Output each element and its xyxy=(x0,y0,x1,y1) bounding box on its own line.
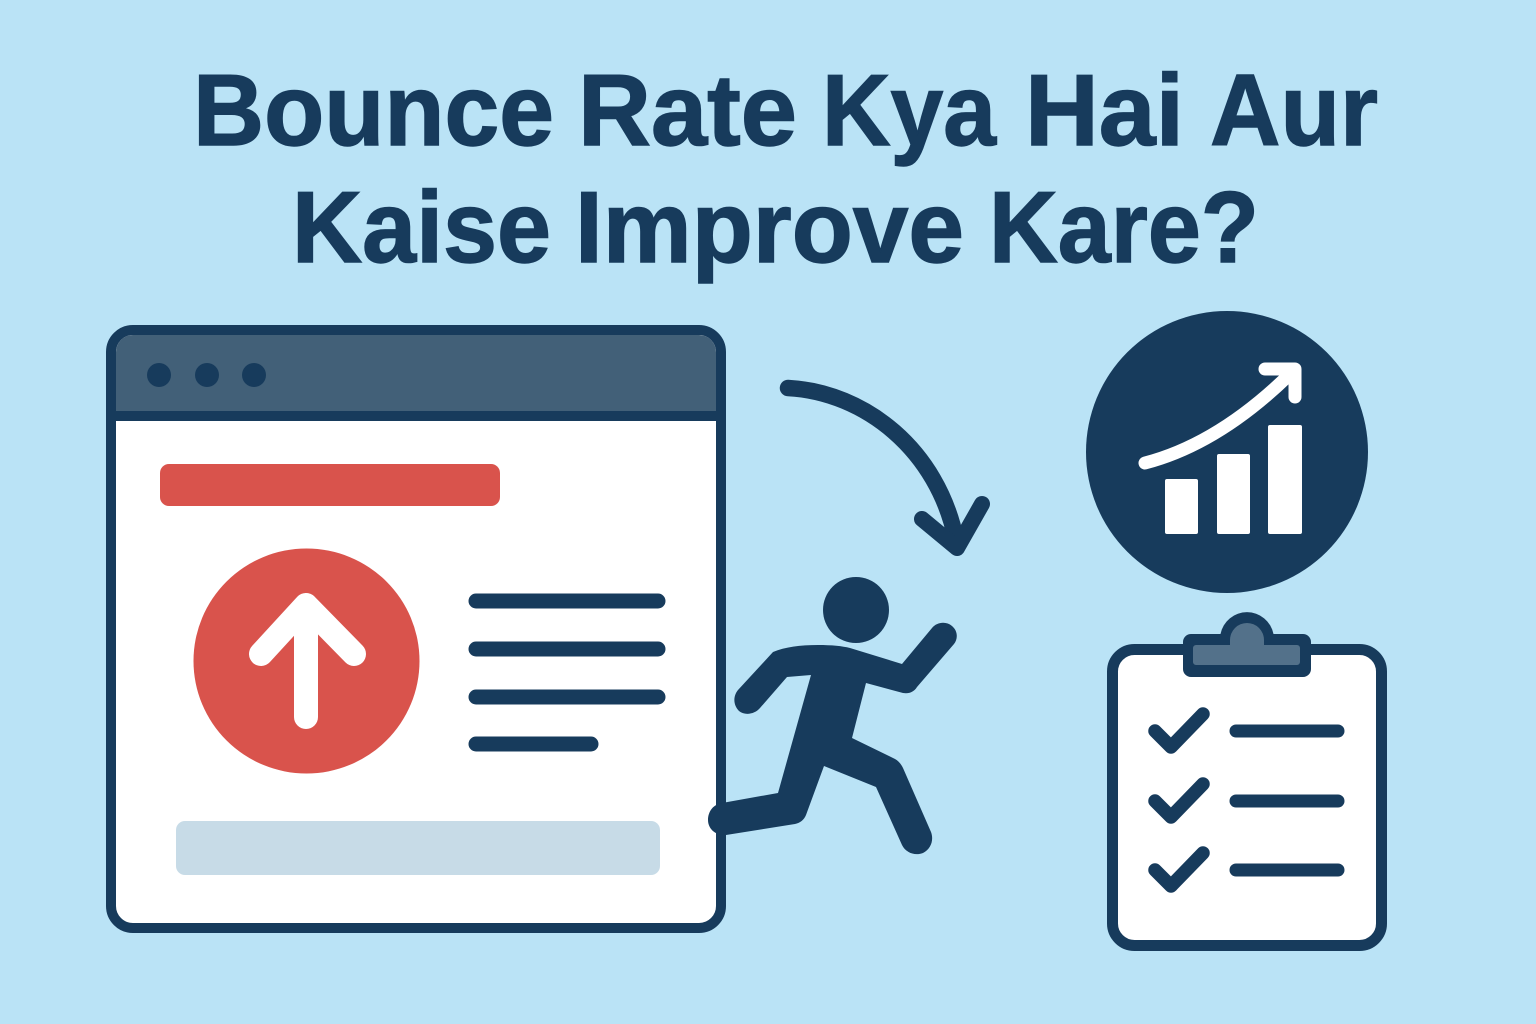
bars xyxy=(1165,425,1302,534)
title: Bounce xyxy=(193,55,554,167)
red headline bar xyxy=(160,464,500,506)
browser title bar xyxy=(116,335,716,412)
red circle with up arrow xyxy=(194,548,420,774)
title xyxy=(193,55,1378,284)
clipboard sheet xyxy=(1112,650,1382,946)
icon: running person xyxy=(708,577,957,854)
title: Hai xyxy=(1025,55,1184,167)
title: Improve xyxy=(575,172,964,284)
title: Rate xyxy=(578,55,797,167)
browser frame xyxy=(111,330,721,928)
icon: growth chart xyxy=(1086,311,1368,593)
clip inner xyxy=(1193,623,1300,665)
arrow: curved xyxy=(788,388,982,548)
grey footer bar xyxy=(176,821,660,875)
title: Kaise xyxy=(292,172,551,284)
title: Kya xyxy=(822,55,997,167)
window dots xyxy=(147,363,266,387)
title: Kare? xyxy=(989,172,1259,284)
panel: browser window xyxy=(111,330,721,928)
icon: clipboard checklist xyxy=(1112,612,1382,946)
trend arrow xyxy=(1145,369,1295,463)
head xyxy=(823,577,889,643)
body silhouette xyxy=(708,623,957,854)
clip outer xyxy=(1183,612,1311,677)
checklist rows xyxy=(1155,714,1338,886)
title: Aur xyxy=(1210,55,1378,167)
text lines xyxy=(476,601,658,744)
